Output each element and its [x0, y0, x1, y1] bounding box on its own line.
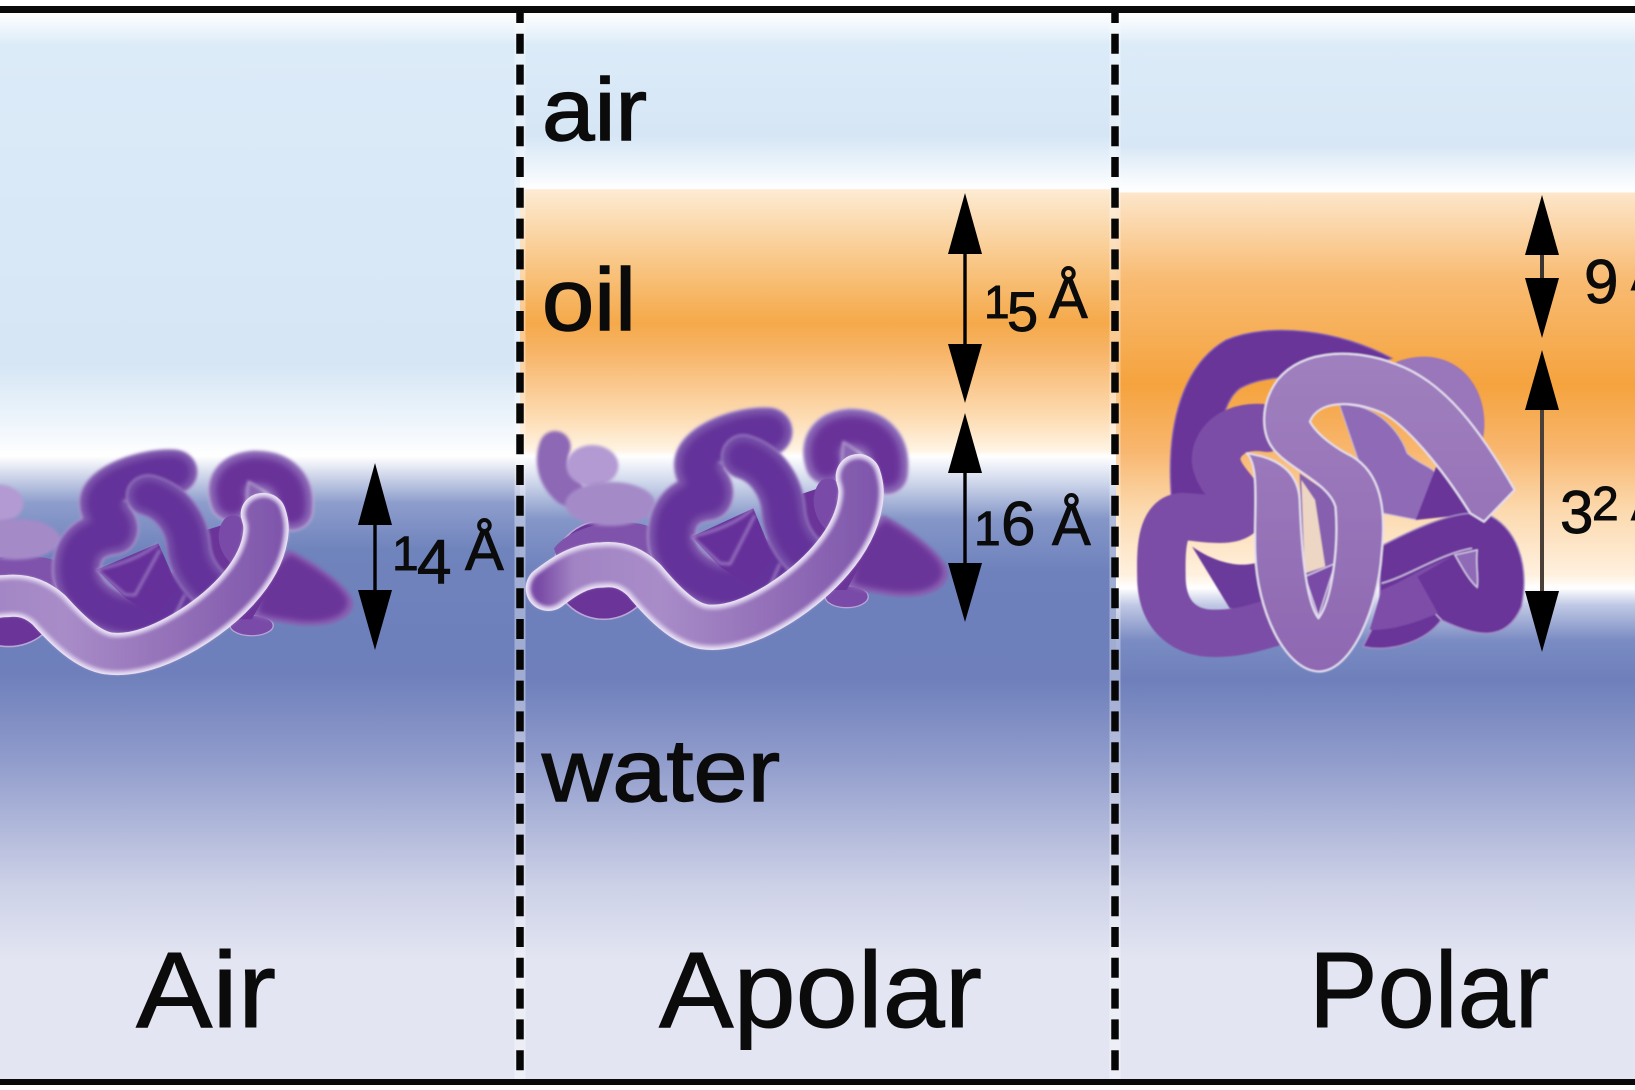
arrow: Polar 9 Å — [1525, 195, 1559, 338]
value: 16 Å: Å — [1052, 493, 1091, 558]
front tube — [1247, 354, 1515, 672]
frame: top border — [0, 6, 1635, 13]
value: 15 Å: 1 — [984, 276, 1010, 328]
divider: left dashed line — [514, 11, 526, 1079]
protein: Air column — [0, 470, 353, 654]
heading: Air: Air — [136, 929, 276, 1050]
heading: Apolar: Apolar — [659, 929, 982, 1050]
arrow: Apolar 16 Å — [948, 413, 982, 622]
value: 15 Å: Å — [1049, 266, 1088, 331]
heading: Polar: Polar — [1309, 929, 1549, 1050]
value: 16 Å: 6 — [1001, 490, 1035, 559]
value: 15 Å: 5 — [1007, 280, 1038, 343]
value: 14 Å: 1 — [392, 528, 419, 581]
label: air layer: air — [542, 60, 647, 159]
lower right dark knot — [1363, 513, 1524, 648]
label: water layer: water — [541, 721, 780, 820]
value: 14 Å: Å — [465, 518, 504, 583]
back dark arc — [1170, 330, 1392, 500]
value: 9 Å: 9 — [1584, 248, 1618, 317]
divider: right dashed line — [1110, 11, 1120, 1079]
frame: bottom border — [0, 1079, 1635, 1085]
value: 32 Å: 3 — [1560, 479, 1593, 546]
label: oil layer: oil — [542, 250, 636, 349]
value: 32 Å: 2 — [1592, 478, 1619, 531]
panel: Polar column background — [1116, 13, 1635, 1079]
protein: Polar column — [1161, 330, 1524, 672]
panel: Air column background — [0, 13, 520, 1079]
protein: Apolar column — [548, 430, 948, 627]
value: 14 Å: 4 — [417, 528, 451, 597]
panel: Apolar column background — [520, 13, 1116, 1079]
arrow: Apolar 15 Å — [948, 193, 982, 403]
value: 16 Å: 1 — [974, 503, 1001, 556]
arrow: Polar 32 Å — [1525, 350, 1559, 652]
arrow: Air 14 Å — [358, 463, 392, 650]
